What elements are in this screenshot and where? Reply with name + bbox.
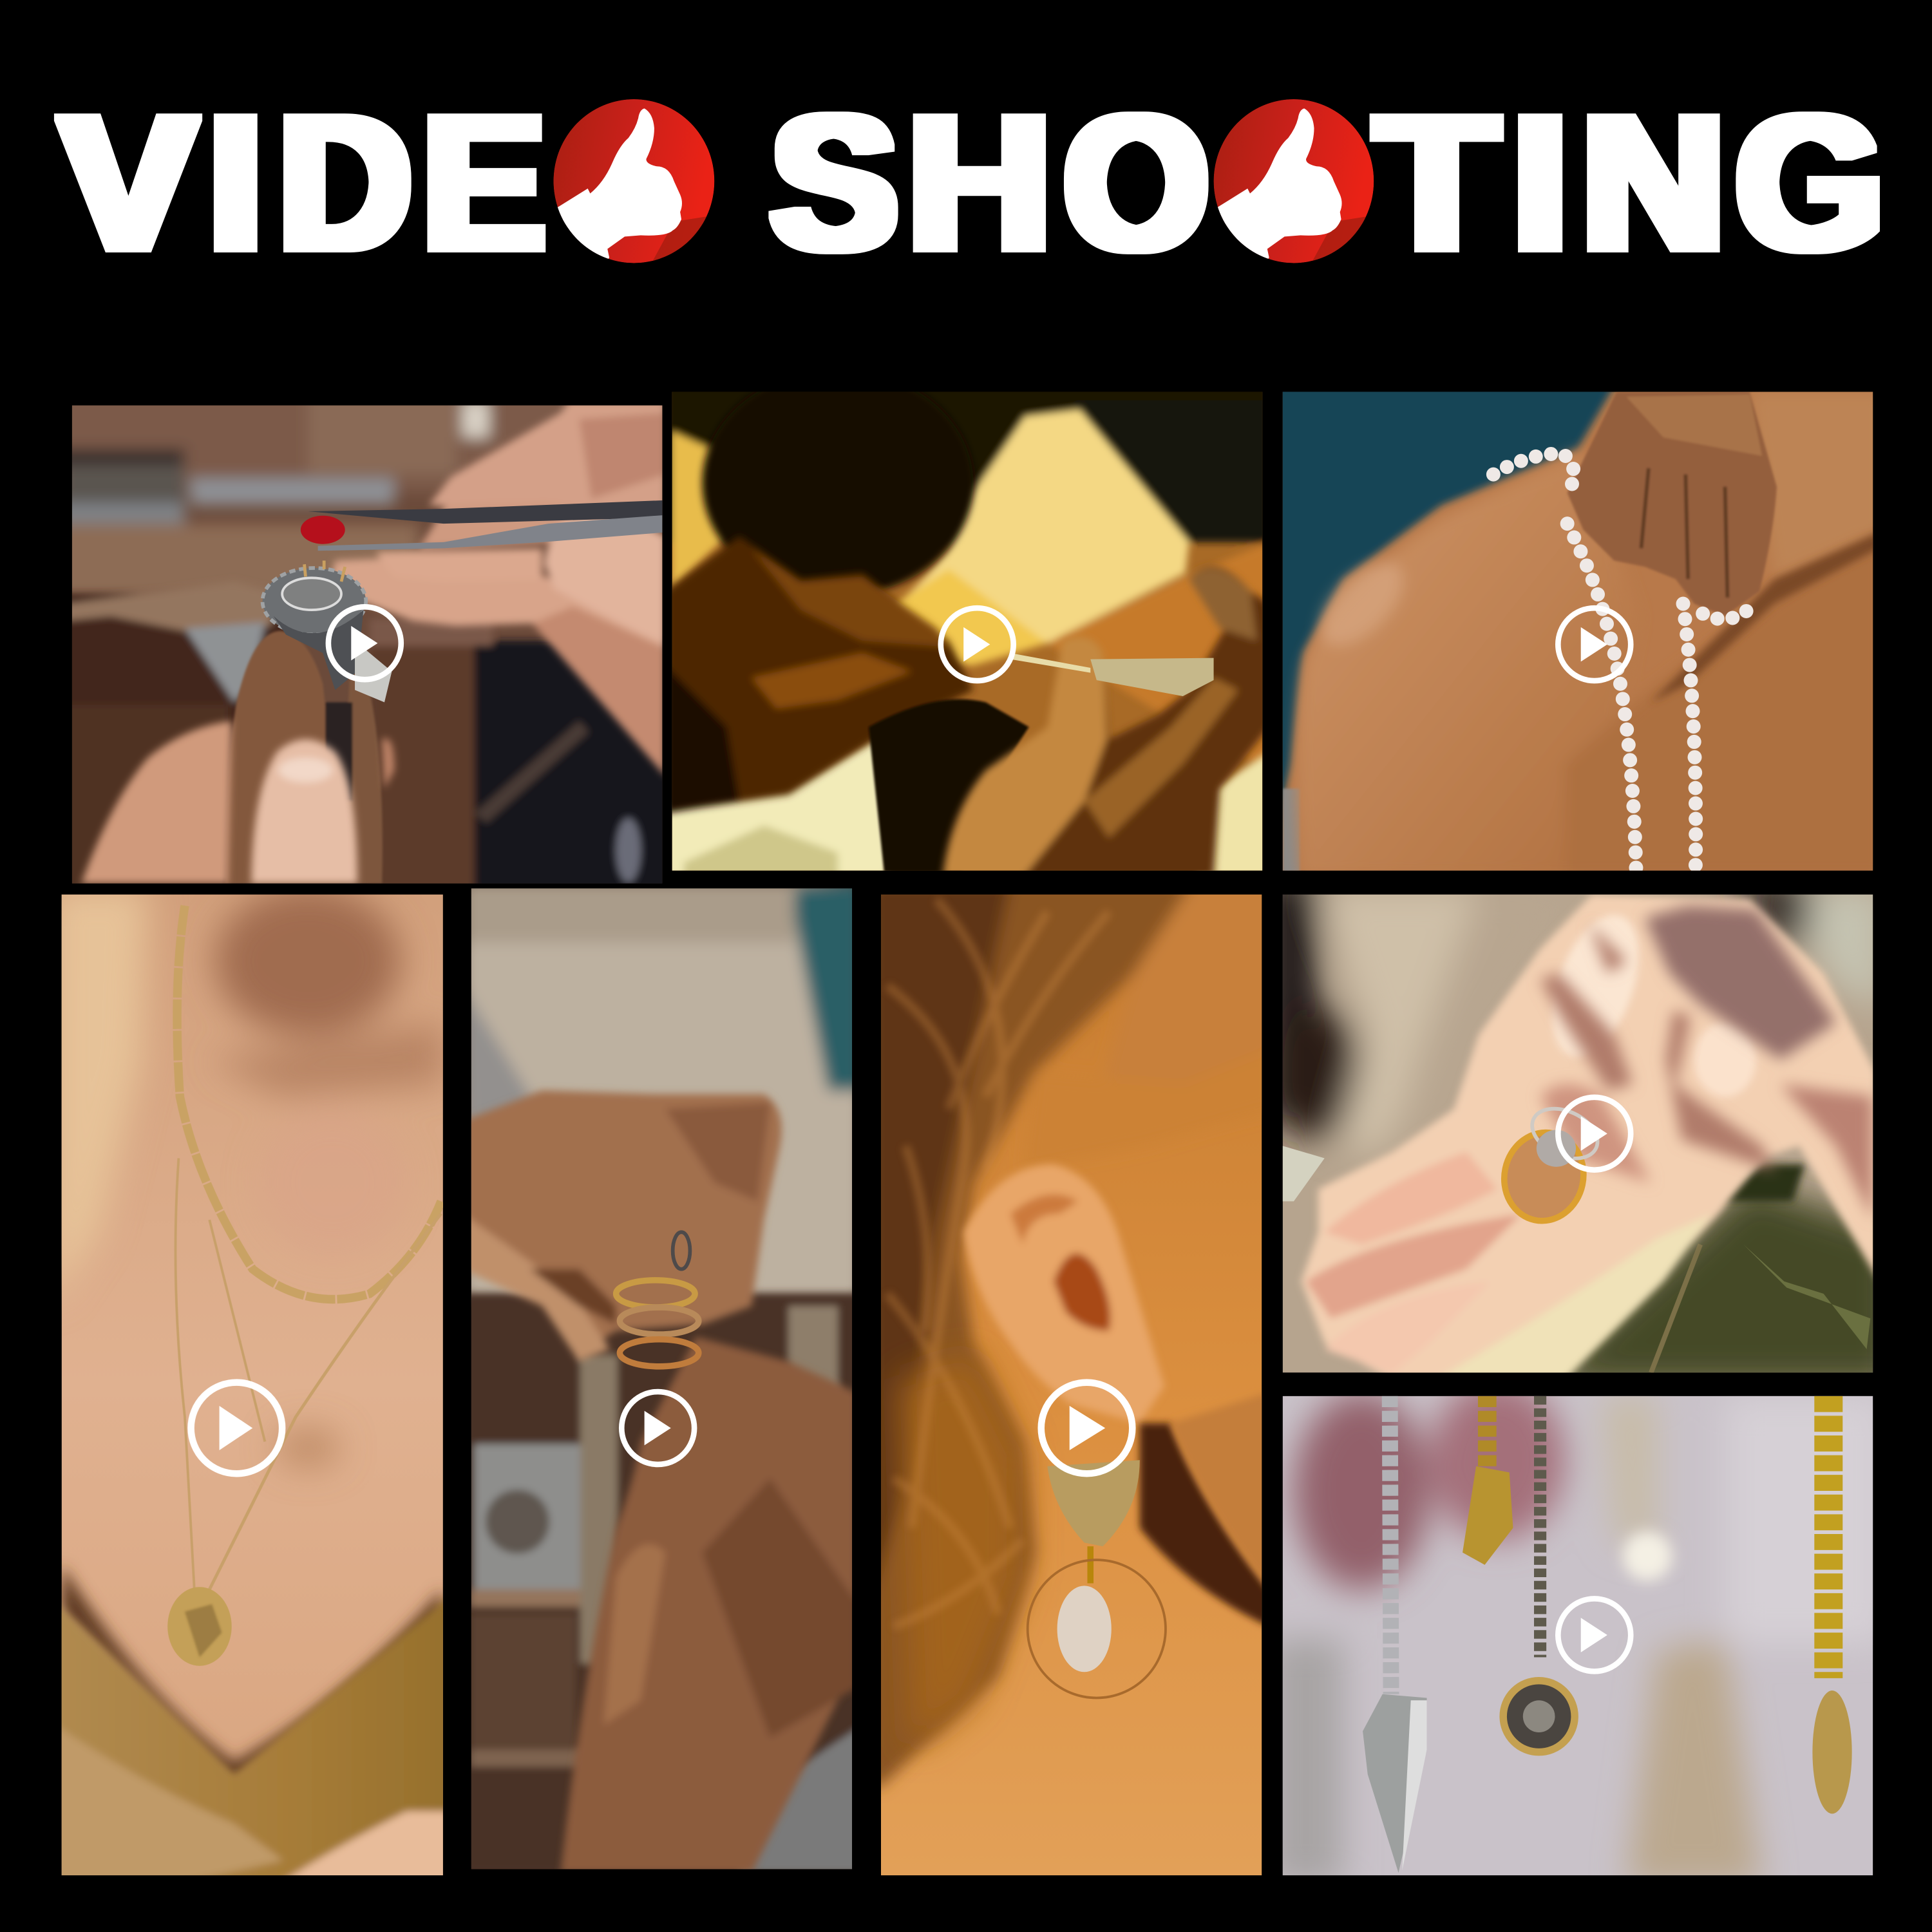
tweezers	[308, 500, 665, 524]
ring	[263, 561, 392, 703]
pale table	[665, 721, 1269, 877]
shelves	[462, 1294, 862, 1873]
gold wedding band	[1496, 1125, 1592, 1228]
top shadow and lit box	[665, 382, 1269, 770]
panel: layered necklaces	[50, 887, 450, 1885]
blurred backdrop	[1269, 1380, 1885, 1885]
title	[54, 99, 1880, 263]
title word: SHO: H	[908, 76, 1051, 290]
head silhouette	[703, 370, 973, 596]
open hand	[1301, 895, 1879, 1380]
icon: play button	[1558, 1097, 1631, 1170]
thick gold chain and disc	[1812, 1396, 1852, 1814]
lower hand and thumb	[81, 721, 394, 884]
dark cylinder	[869, 699, 1029, 877]
shadow over neckline	[62, 1565, 442, 1786]
panel: jeweller setting ruby with tweezers	[72, 406, 662, 884]
icon: play button	[191, 1383, 282, 1473]
icon: play button	[1558, 1598, 1631, 1671]
hair strands	[887, 900, 1109, 1627]
right hand and arm	[561, 1337, 857, 1873]
icon: play button	[941, 608, 1014, 681]
earring	[1028, 1460, 1166, 1698]
title word: TING: T	[1376, 76, 1498, 290]
icon: thumbs up circle 2	[1213, 99, 1374, 263]
icon: play button	[328, 607, 401, 679]
right hand	[943, 566, 1269, 877]
bokeh highlight	[1623, 1531, 1672, 1581]
icon: play button	[621, 1392, 694, 1464]
blurred backdrop	[1263, 875, 1897, 1386]
leaf sprig	[1283, 1146, 1870, 1372]
gold satin top	[55, 1596, 450, 1885]
panel: hanging chains and pendants	[1269, 1380, 1885, 1885]
ruby	[301, 516, 345, 544]
title word: TING: G	[1736, 76, 1884, 290]
left hand	[665, 536, 973, 813]
stacked rings	[616, 1232, 699, 1367]
panel: pearl earring	[869, 882, 1275, 1875]
panel: hands with gold rings	[462, 881, 862, 1873]
icon: thumbs up circle 1	[554, 99, 715, 263]
title word: SHO: S	[771, 76, 898, 290]
clamp	[225, 631, 383, 884]
engraving tool	[1010, 653, 1214, 696]
panel: engraving ring under warm light	[665, 370, 1269, 877]
workbench	[72, 583, 662, 884]
workshop background	[72, 406, 662, 598]
diamond ring	[1524, 1099, 1605, 1168]
hair	[869, 882, 1275, 1786]
gold chain with charm	[1463, 1396, 1513, 1565]
ear	[963, 1164, 1164, 1423]
upper hand	[462, 1090, 782, 1361]
title word: VIDE: V	[61, 76, 197, 290]
concrete wall	[462, 881, 862, 1300]
teal wall	[1269, 376, 1620, 887]
title word: VIDE: D	[279, 76, 411, 290]
hair and neck shadows	[50, 887, 444, 1468]
leaf shadows on palm	[1540, 905, 1873, 1220]
chain necklaces	[175, 905, 441, 1596]
pearl strands	[1493, 453, 1754, 877]
title word: TING: N	[1582, 76, 1725, 290]
icon: play button	[1041, 1383, 1132, 1473]
coin pendant	[167, 1587, 232, 1666]
title word: VIDE: I	[209, 76, 262, 290]
title word: SHO: O	[1065, 76, 1208, 290]
dark lock behind ear	[1140, 1423, 1269, 1627]
fold shadow	[1651, 533, 1879, 703]
knee	[1297, 392, 1885, 877]
hand on knee	[1567, 392, 1777, 616]
panel: wedding rings in palm	[1263, 875, 1897, 1386]
title word: VIDE: E	[423, 76, 545, 290]
panel: pearls over knee	[1269, 376, 1885, 887]
dark chain with watch pendant	[1503, 1396, 1575, 1752]
silver chain and pendant	[1363, 1396, 1427, 1873]
title word: TING: I	[1513, 76, 1567, 290]
icon: play button	[1558, 608, 1631, 681]
upper hand	[330, 401, 665, 776]
